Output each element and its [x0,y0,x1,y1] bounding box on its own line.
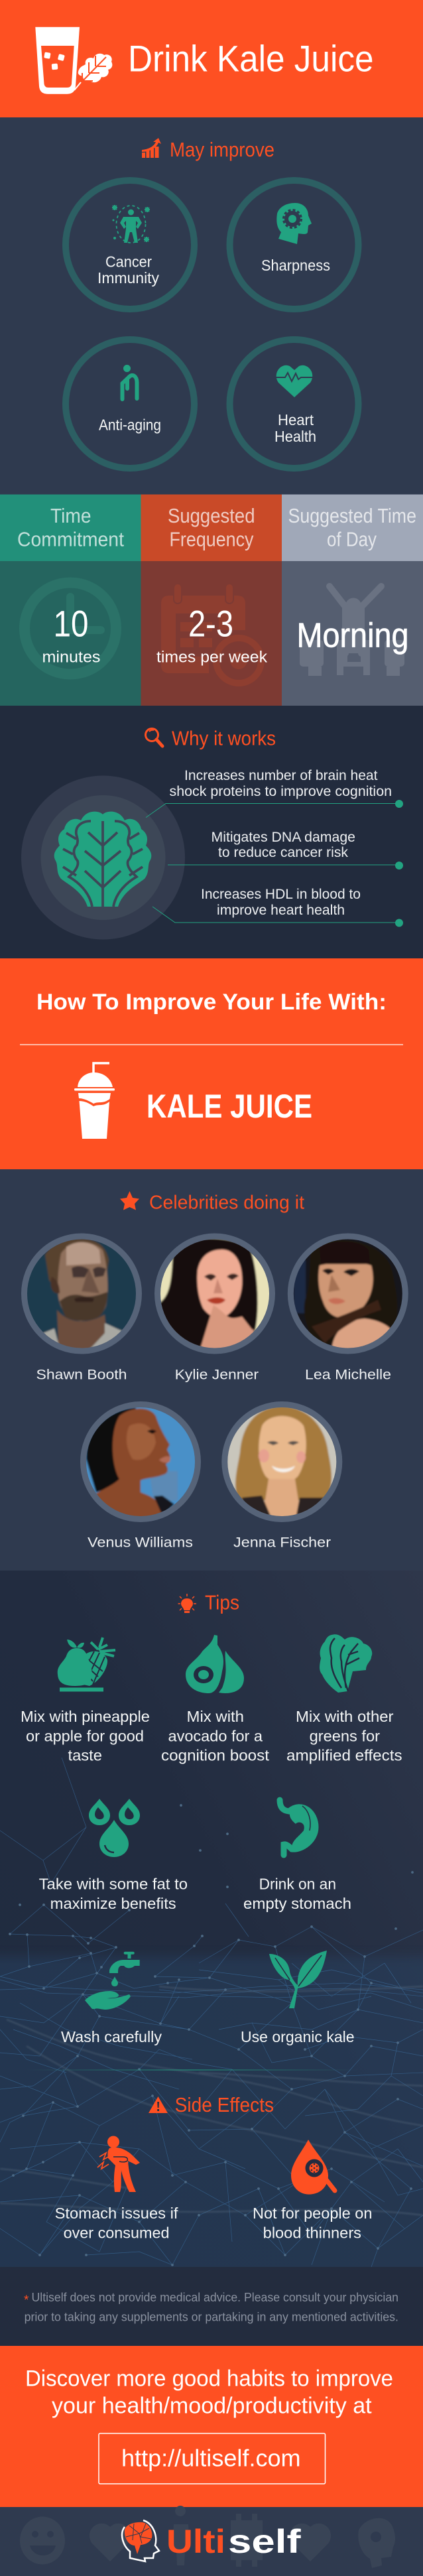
icon: stomach [280,1800,316,1855]
panel: tips and side effects background [0,1571,423,2346]
benefit: heart health: Health [274,428,316,445]
panel: suggested frequency [141,495,282,706]
icon: person with stomach pain [97,2136,140,2192]
icon: warning triangle [149,2096,168,2113]
icon: avocado [186,1635,244,1693]
tip: empty stomach: empty stomach [243,1895,351,1912]
benefit: cancer immunity: Cancer [105,253,152,271]
icon: brain head [122,2520,159,2561]
reason: HDL in blood [152,887,403,927]
reason: DNA damage: to reduce cancer risk [218,845,348,860]
disclaimer: prior to taking any supplements or partaking in any mentioned activities. [25,2311,398,2324]
panel: how to improve banner [0,958,423,1169]
benefit: sharpness [229,180,358,309]
icon: lightbulb [178,1594,196,1613]
disclaimer: Ultiself does not provide medical advice. Please consult your physician [32,2291,398,2304]
panel: call to action: Discover more good habits to improve [25,2366,393,2392]
icon: heart with pulse [276,365,313,397]
icon: star [120,1191,139,1210]
side effect: blood thinners: Not for people on [253,2205,372,2222]
tip: pineapple or apple: taste [68,1747,102,1764]
icon: kale leaf in circles [21,776,185,939]
icon: head with gear [276,203,312,244]
url button: http://ultiself.com [121,2444,301,2471]
reason: HDL in blood: Increases HDL in blood to [201,887,361,902]
tip: avocado: avocado for a [168,1728,263,1745]
tip: other greens: greens for [310,1728,380,1745]
tip: organic kale: Use organic kale [241,2028,355,2045]
tip: pineapple or apple: or apple for good [26,1728,144,1745]
reason: brain heat shock proteins: shock proteins to improve cognition [170,784,392,799]
panel: suggested frequency: 2-3 [188,602,233,645]
panel: suggested frequency: Suggested [168,504,255,527]
side effect: stomach issues [55,2136,178,2241]
side effect: stomach issues: over consumed [64,2224,169,2241]
panel: time commitment: Commitment [17,528,124,550]
panel: suggested frequency: times per week [156,649,268,666]
side effect: stomach issues: Stomach issues if [55,2205,178,2222]
disclaimer [24,2291,398,2324]
portrait: Jenna Fischer: Jenna Fischer [233,1535,331,1551]
tip: other greens: Mix with other [296,1708,394,1725]
panel: time commitment: minutes [42,649,101,666]
tip: other greens [286,1634,402,1764]
icon: elderly person with cane [122,365,137,399]
heading: tips [178,1590,239,1614]
tip: avocado [161,1635,270,1764]
benefit: anti-aging [66,340,194,468]
tip: take with fat [39,1799,188,1912]
side effect: blood thinners: blood thinners [263,2224,361,2241]
portrait: Jenna Fischer [222,1403,345,1551]
reason: brain heat shock proteins [146,768,403,818]
benefit: anti-aging: Anti-aging [99,417,161,434]
network texture [0,1758,423,2282]
logo: Ultiself: self [228,2523,301,2560]
tip: empty stomach [243,1800,351,1912]
tip: organic kale [241,1951,355,2045]
reason: brain heat shock proteins: Increases number of brain heat [184,768,378,783]
icon: blood drop with magnifier [291,2140,335,2195]
reason: DNA damage [168,830,403,869]
logo: Ultiself [122,2520,301,2561]
portrait: Shawn Booth: Shawn Booth [36,1368,127,1383]
panel: footer [0,2506,423,2576]
icon: greens [320,1634,372,1693]
icon: juice glass with kale leaf [35,27,112,94]
panel: time commitment: 10 [53,602,89,645]
icon: clock watermark [25,582,116,674]
reason: DNA damage: Mitigates DNA damage [211,830,355,845]
portrait: Venus Williams: Venus Williams [88,1535,193,1551]
panel: time commitment: Time [50,504,91,527]
panel: call to action [0,2346,423,2507]
logo: Ultiself: Ulti [166,2523,225,2560]
tip: avocado: cognition boost [161,1747,270,1764]
portrait: Venus Williams [80,1403,202,1551]
section: side effects [55,2093,372,2241]
portrait: Lea Michelle: Lea Michelle [305,1368,391,1383]
tip: wash carefully: Wash carefully [61,2028,162,2045]
url button [99,2433,325,2484]
icon: tap and hand [85,1952,140,2010]
tip: other greens: amplified effects [286,1747,402,1764]
panel: why it works [0,706,423,958]
portrait: Lea Michelle [288,1234,408,1383]
icon: immune person [112,205,150,243]
section: tips [21,1590,402,2045]
side effect: blood thinners [253,2140,372,2241]
icon: fruit [58,1638,115,1691]
tip: pineapple or apple [21,1638,150,1764]
benefit: cancer immunity [66,180,194,309]
benefit: cancer immunity: Immunity [97,269,159,287]
tip: take with fat: Take with some fat to [39,1876,188,1893]
tip: wash carefully [61,1952,162,2045]
panel: suggested time of day: of Day [327,528,377,550]
icon: calendar watermark [161,584,261,683]
icon: growth chart [142,138,161,158]
icon: person waking watermark [300,586,404,676]
tip: pineapple or apple: Mix with pineapple [21,1708,150,1725]
disclaimer: * [24,2293,29,2307]
panel: suggested time of day: Morning [297,617,408,655]
panel: celebrities [21,1191,408,1547]
reason: HDL in blood: improve heart health [217,903,345,918]
footer watermark icons [20,2506,395,2568]
panel: suggested frequency: Frequency [170,528,254,550]
tip: avocado: Mix with [187,1708,244,1725]
panel: time commitment [0,495,141,706]
icon: sprout [269,1951,327,2008]
icon: juice cup [74,1063,115,1139]
panel: suggested time of day [282,495,423,706]
benefit: heart health [229,340,358,468]
tip: empty stomach: Drink on an [259,1876,336,1893]
tip: take with fat: maximize benefits [50,1895,176,1912]
heading: why it works: Why it works [172,727,276,749]
heading: side effects: Side Effects [175,2093,274,2116]
panel: call to action: your health/mood/productivity at [52,2393,372,2418]
banner heading: How To Improve Your Life With: [36,990,387,1015]
benefit: sharpness: Sharpness [261,257,330,274]
portrait: Kylie Jenner: Kylie Jenner [175,1368,259,1383]
heading: tips: Tips [205,1590,239,1614]
portrait: Kylie Jenner [156,1234,275,1383]
icon: oil drops [89,1799,140,1857]
panel: header [0,0,423,117]
heading: celebrities: Celebrities doing it [149,1192,304,1214]
banner subject: KALE JUICE [147,1088,312,1125]
heading: may improve: May improve [170,138,274,161]
icon: magnifier [146,728,162,746]
title: Drink Kale Juice [128,37,374,80]
portrait: Shawn Booth [20,1234,146,1383]
panel: may improve [0,117,423,494]
benefit: heart health: Heart [278,411,314,428]
